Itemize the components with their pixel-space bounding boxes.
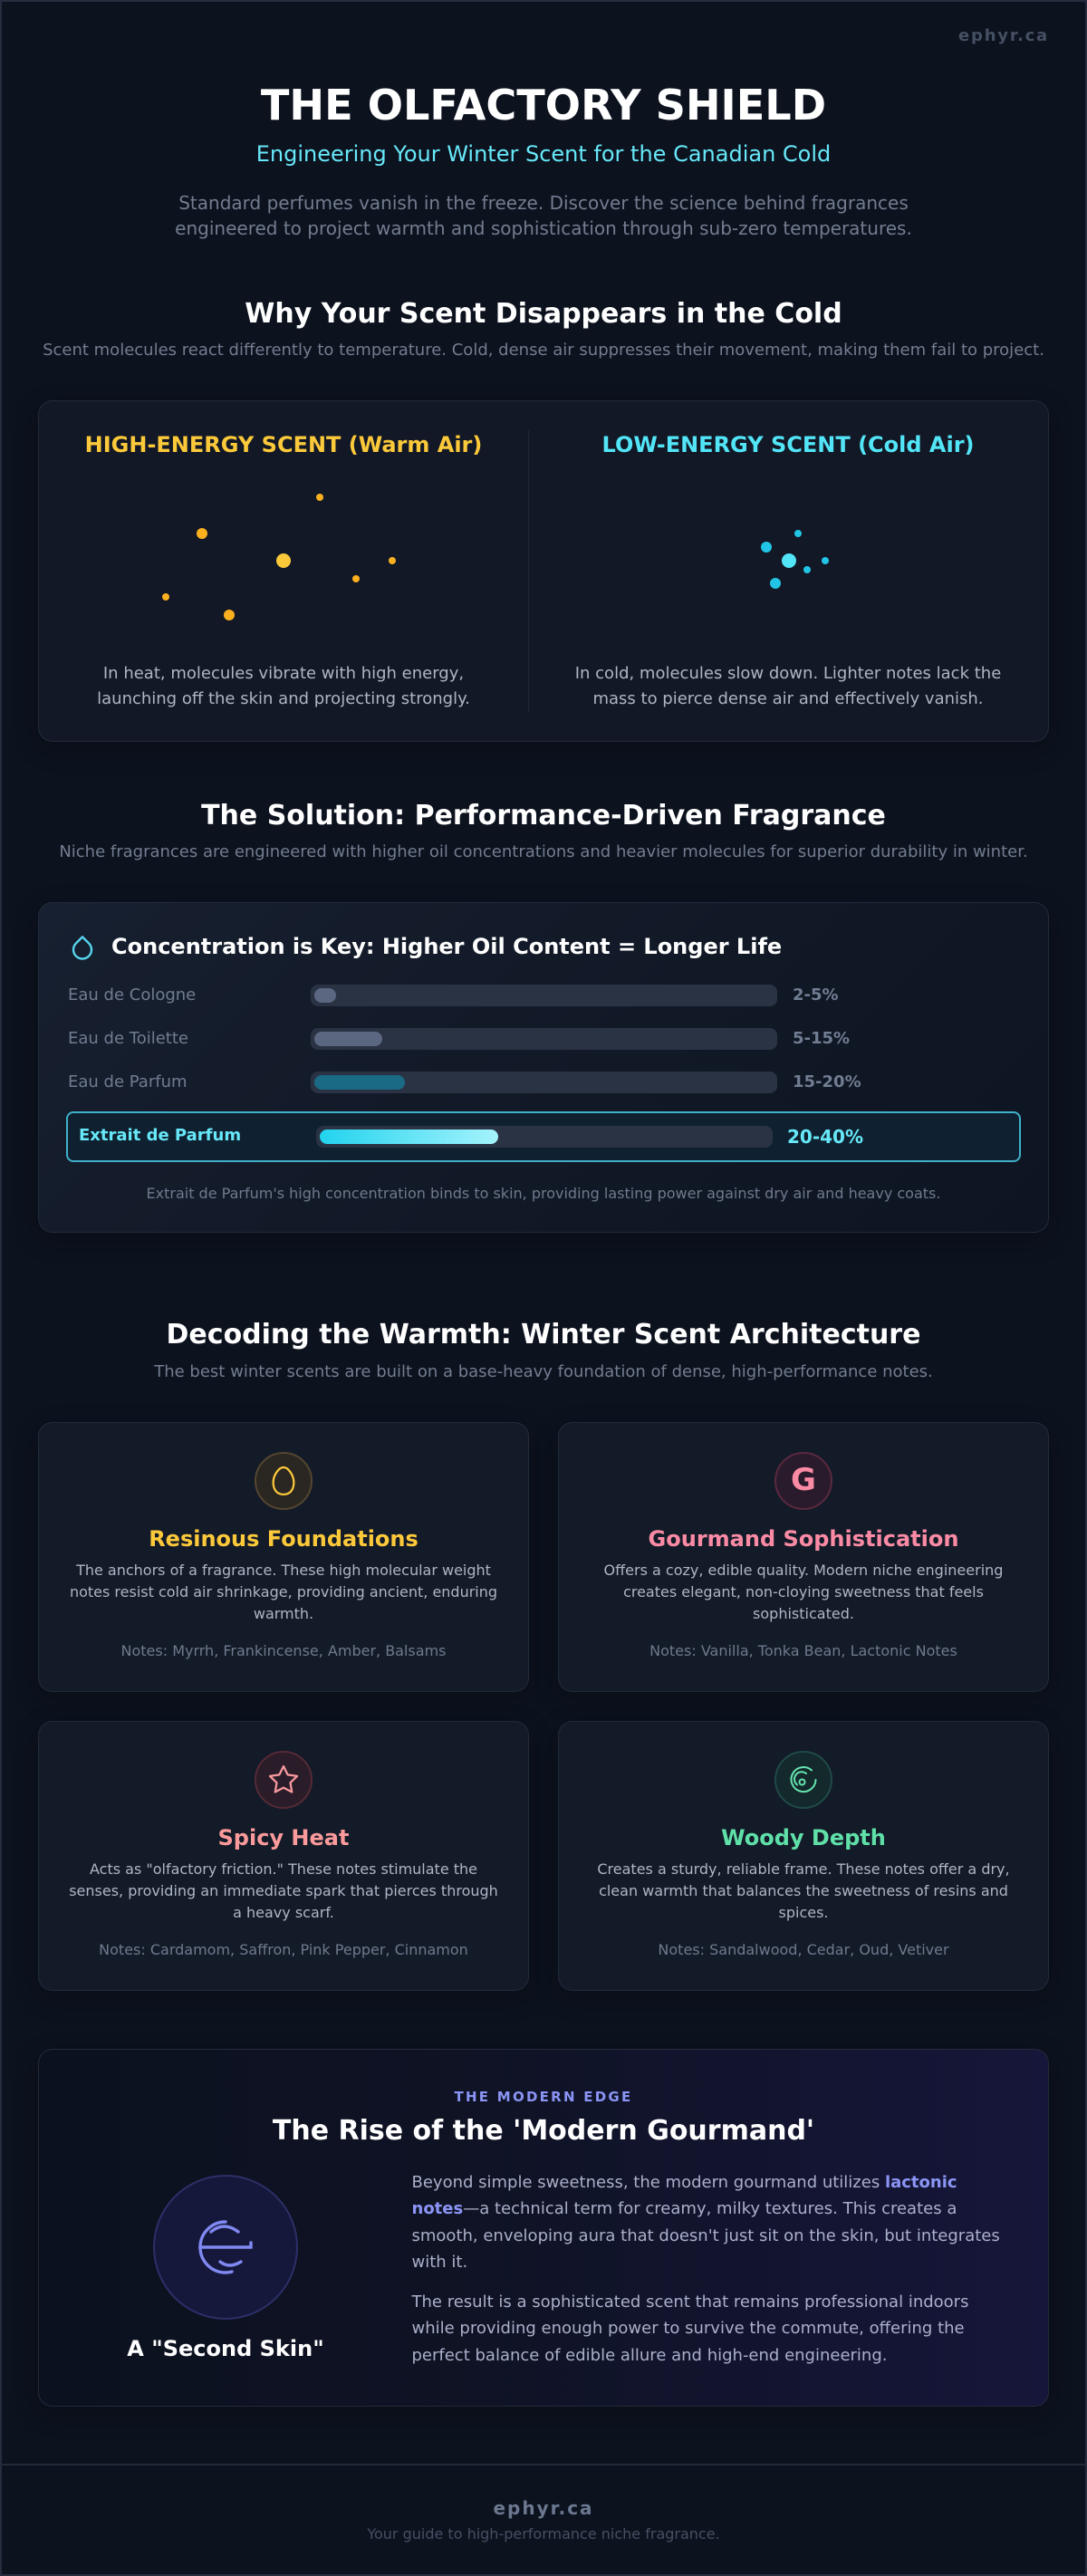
- heading: why your scent disappears: Why Your Scent Disappears in the Cold: [245, 298, 842, 330]
- card description: Creates a sturdy, reliable frame. These notes offer a dry,: [597, 1860, 1010, 1878]
- card description: Offers a cozy, edible quality. Modern niche engineering: [604, 1562, 1003, 1579]
- card notes: Notes: Vanilla, Tonka Bean, Lactonic Notes: [649, 1642, 957, 1659]
- bar: eau de parfum: [68, 1072, 861, 1093]
- warm heading: HIGH-ENERGY SCENT (Warm Air): [85, 432, 482, 457]
- cold explanation: In cold, molecules slow down. Lighter notes lack the: [575, 664, 1001, 683]
- card description: notes resist cold air shrinkage, providing ancient, enduring: [70, 1583, 497, 1600]
- bar: extrait de parfum highlighted: 20-40%: [787, 1126, 863, 1148]
- subheading: solution: Niche fragrances are engineered with higher oil concentrations and heavier molecules for superior durability in winter.: [59, 842, 1028, 861]
- cold explanation: mass to pierce dense air and effectively vanish.: [592, 689, 984, 708]
- icon: star: [255, 1751, 313, 1809]
- bar: extrait de parfum highlighted: Extrait de Parfum: [79, 1126, 241, 1145]
- heading: decoding the warmth: Decoding the Warmth: Winter Scent Architecture: [167, 1319, 920, 1350]
- card description: spices.: [779, 1904, 828, 1921]
- card description: warmth.: [254, 1605, 313, 1622]
- bar: extrait de parfum highlighted: [66, 1111, 1021, 1162]
- card description: [69, 1860, 498, 1921]
- card description: The anchors of a fragrance. These high molecular weight: [76, 1562, 491, 1579]
- card description: creates elegant, non-cloying sweetness that feels: [623, 1583, 984, 1600]
- card description: clean warmth that balances the sweetness of resins and: [599, 1882, 1008, 1899]
- icon: letter G: G: [791, 1462, 816, 1498]
- heading: the solution: The Solution: Performance-Driven Fragrance: [201, 800, 886, 831]
- intro text: engineered to project warmth and sophistication through sub-zero temperatures.: [175, 217, 912, 239]
- card: resinous foundations: [38, 1422, 529, 1692]
- card title: Spicy Heat: [218, 1825, 349, 1850]
- title: THE OLFACTORY SHIELD: [261, 81, 826, 130]
- card title: Woody Depth: [721, 1825, 886, 1850]
- eyebrow label: THE MODERN EDGE: [455, 2089, 632, 2105]
- panel: the modern edge: [38, 2049, 1049, 2407]
- icon: second skin emblem: [153, 2175, 298, 2320]
- card description: Acts as "olfactory friction." These notes stimulate the: [90, 1860, 477, 1878]
- chart caption: Extrait de Parfum's high concentration binds to skin, providing lasting power against dry air and heavy coats.: [147, 1185, 940, 1202]
- chart heading: Concentration is Key: Higher Oil Content = Longer Life: [111, 934, 782, 959]
- brand mark top right: ephyr.ca: [958, 26, 1049, 45]
- modern gourmand result text: perfect balance of edible allure and high-end engineering.: [411, 2346, 888, 2365]
- bar: eau de cologne: Eau de Cologne: [68, 985, 196, 1004]
- card: spicy heat: [38, 1721, 529, 1991]
- icon: droplet: [72, 936, 92, 960]
- bar: eau de toilette: 5-15%: [793, 1029, 850, 1048]
- bar: eau de toilette: Eau de Toilette: [68, 1029, 188, 1048]
- modern gourmand body text: [411, 2173, 1000, 2272]
- bar: eau de parfum: 15-20%: [793, 1072, 861, 1091]
- footer: [0, 2464, 1087, 2576]
- modern gourmand result text: The result is a sophisticated scent that remains professional indoors: [411, 2292, 968, 2312]
- card title: Gourmand Sophistication: [649, 1526, 958, 1552]
- modern gourmand result text: [411, 2292, 968, 2365]
- bar: eau de cologne: [68, 985, 839, 1006]
- bar: eau de toilette: [68, 1028, 850, 1050]
- cold heading: LOW-ENERGY SCENT (Cold Air): [601, 432, 975, 457]
- warm molecules diagram: [162, 494, 396, 620]
- card description: [604, 1562, 1003, 1622]
- emblem caption: A "Second Skin": [127, 2336, 324, 2361]
- modern gourmand result text: while providing enough power to survive the commute, offering the: [411, 2319, 965, 2338]
- card description: sophisticated.: [753, 1605, 854, 1622]
- bar: eau de cologne: 2-5%: [793, 985, 839, 1004]
- subheading: why: Scent molecules react differently to temperature. Cold, dense air suppresses their movement, making them fail to project.: [43, 341, 1044, 360]
- icon: egg: [255, 1452, 313, 1510]
- warm explanation: launching off the skin and projecting strongly.: [97, 689, 470, 708]
- card description: senses, providing an immediate spark that pierces through: [69, 1882, 498, 1899]
- icon: letter G: [774, 1452, 832, 1510]
- subtitle: Engineering Your Winter Scent for the Canadian Cold: [256, 141, 831, 167]
- card notes: Notes: Cardamom, Saffron, Pink Pepper, Cinnamon: [99, 1941, 468, 1958]
- card description: [597, 1860, 1010, 1921]
- warm explanation: In heat, molecules vibrate with high energy,: [103, 664, 464, 683]
- warm explanation: [97, 664, 470, 708]
- subheading: decoding: The best winter scents are built on a base-heavy foundation of dense, high-performance notes.: [154, 1362, 933, 1381]
- intro text: Standard perfumes vanish in the freeze. Discover the science behind fragrances: [178, 192, 909, 214]
- modern gourmand body text: with it.: [411, 2253, 467, 2272]
- cold molecules diagram: [761, 530, 829, 589]
- panel: concentration chart: [38, 902, 1049, 1233]
- bar: eau de parfum: Eau de Parfum: [68, 1072, 188, 1091]
- cold explanation: [575, 664, 1001, 708]
- card description: [70, 1562, 497, 1622]
- intro text: [175, 192, 912, 239]
- card: woody depth: [558, 1721, 1049, 1991]
- modern gourmand body text: smooth, enveloping aura that doesn't just sit on the skin, but integrates: [411, 2226, 1000, 2245]
- card title: Resinous Foundations: [149, 1526, 418, 1552]
- icon: spiral: [774, 1751, 832, 1809]
- footer brand: ephyr.ca: [493, 2497, 594, 2519]
- panel: warm vs cold molecules: [38, 400, 1049, 742]
- section title: The Rise of the 'Modern Gourmand': [273, 2115, 814, 2147]
- card notes: Notes: Sandalwood, Cedar, Oud, Vetiver: [658, 1941, 949, 1958]
- modern gourmand body text: notes—a technical term for creamy, milky textures. This creates a: [411, 2199, 957, 2218]
- card description: a heavy scarf.: [233, 1904, 334, 1921]
- card: gourmand sophistication: [558, 1422, 1049, 1692]
- footer tagline: Your guide to high-performance niche fragrance.: [367, 2525, 720, 2542]
- card notes: Notes: Myrrh, Frankincense, Amber, Balsams: [121, 1642, 446, 1659]
- modern gourmand body text: Beyond simple sweetness, the modern gourmand utilizes lactonic: [411, 2173, 957, 2192]
